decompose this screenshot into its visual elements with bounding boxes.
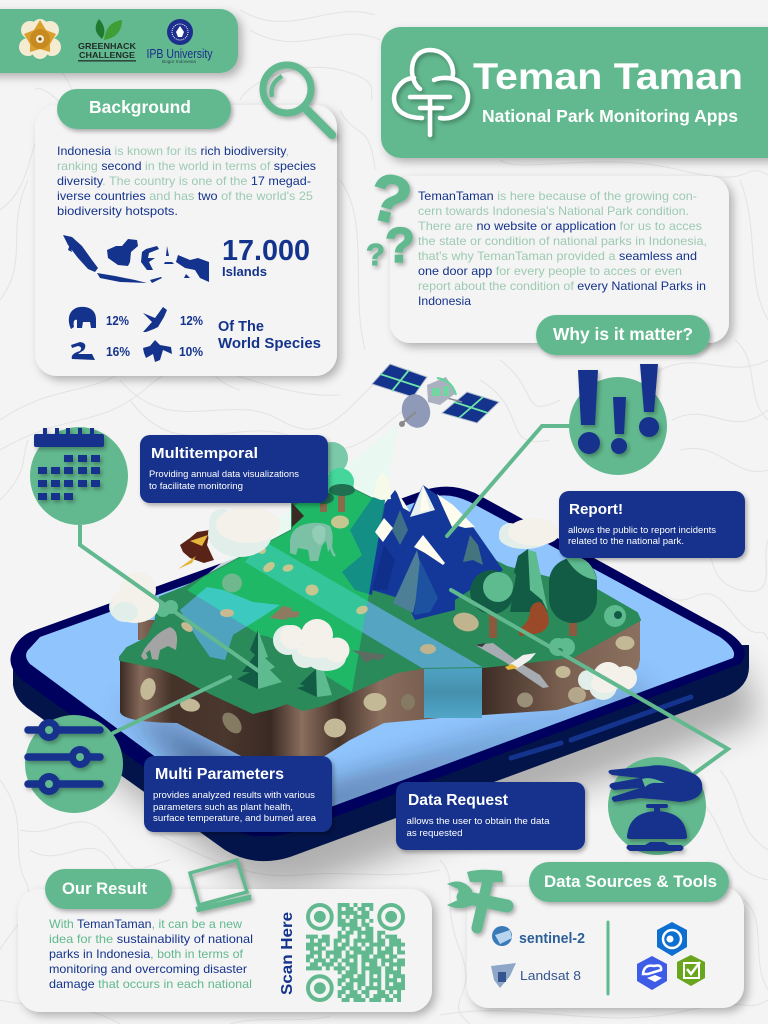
logo: greenhack challenge: CHALLENGE bbox=[79, 50, 135, 60]
background paragraph: iverse countries and has two of the world's 25 bbox=[57, 189, 313, 203]
icon: blue globe app bbox=[657, 922, 687, 956]
beam over surface bbox=[187, 490, 385, 692]
heading: data sources and tools bbox=[529, 862, 729, 902]
heading: background bbox=[57, 89, 231, 129]
heading: why is it matter: Why is it matter? bbox=[553, 324, 693, 344]
background paragraph: biodiversity hotspots. bbox=[57, 204, 178, 218]
result paragraph: damage that occurs in each national bbox=[49, 977, 252, 991]
callout: multitemporal bbox=[140, 435, 328, 503]
result paragraph bbox=[49, 917, 253, 991]
species caption bbox=[218, 319, 321, 352]
callout: report: Report! bbox=[569, 501, 623, 518]
callout: multi parameters: surface temperature, and burned area bbox=[153, 813, 317, 824]
panel: data sources and tools bbox=[447, 862, 744, 1008]
icon: purple cloud app bbox=[637, 956, 667, 990]
connector: data request bbox=[451, 590, 728, 773]
icon: satellite bbox=[372, 364, 499, 431]
title: Teman Taman bbox=[473, 56, 743, 97]
icon: snake bbox=[71, 342, 95, 360]
connector: report bbox=[447, 426, 569, 536]
right forest bbox=[470, 549, 626, 656]
species caption: Of The bbox=[218, 319, 264, 335]
callout: multitemporal: Multitemporal bbox=[151, 445, 258, 462]
icon: question marks: ? bbox=[366, 237, 385, 272]
stat: flower share: 10% bbox=[179, 345, 203, 359]
stat: 17.000 islands: 17.000 bbox=[222, 235, 310, 267]
callout: data request bbox=[396, 782, 585, 850]
logo: university emblem bbox=[19, 19, 61, 59]
icon: magnifier bbox=[263, 65, 332, 135]
surface rocks bbox=[179, 546, 481, 654]
scan here label: Scan Here bbox=[279, 912, 296, 995]
waterfall bbox=[424, 667, 482, 718]
icon: laptop bbox=[190, 860, 250, 911]
species caption: World Species bbox=[218, 336, 321, 352]
cloud bbox=[273, 619, 350, 671]
animal: rhinoceros bbox=[141, 627, 177, 660]
heading: our result bbox=[45, 869, 172, 909]
background paragraph bbox=[57, 144, 316, 218]
snow caps bbox=[373, 472, 391, 500]
icon: flower bbox=[143, 340, 172, 362]
panel: our result bbox=[18, 860, 432, 1012]
clouds bbox=[109, 507, 637, 700]
satellite beam bbox=[187, 425, 398, 692]
logo: landsat 8 bbox=[491, 963, 581, 988]
callout: data request: allows the user to obtain the data bbox=[406, 816, 550, 827]
icon: exclamation marks bbox=[569, 364, 667, 475]
island soil bbox=[120, 617, 640, 778]
why paragraph: cern towards Indonesia's National Park condition. bbox=[418, 204, 689, 218]
why paragraph: one door app for every people to acces or even bbox=[418, 264, 682, 278]
logo: landsat 8: Landsat 8 bbox=[520, 968, 581, 983]
qr code bbox=[306, 905, 405, 1000]
animal: elephant bbox=[290, 523, 335, 561]
tablet screen bbox=[26, 495, 734, 806]
tablet bbox=[0, 480, 768, 890]
panel: why it matters bbox=[362, 158, 729, 355]
logo: ipb university: IPB University bbox=[146, 47, 213, 61]
callout: multi parameters: parameters such as plant health, bbox=[153, 802, 293, 813]
heading: why is it matter bbox=[536, 315, 710, 355]
panel: background bbox=[35, 65, 337, 376]
why paragraph: There are no website or application for us to acces bbox=[418, 219, 702, 233]
why paragraph bbox=[418, 189, 707, 308]
result paragraph: monitoring and overcoming disaster bbox=[49, 962, 247, 976]
background paragraph: Indonesia is known for its rich biodiversity , bbox=[57, 144, 289, 158]
stat: 17.000 islands: Islands bbox=[222, 265, 267, 279]
callout: multitemporal: to facilitate monitoring bbox=[149, 481, 243, 492]
icon: calendar bbox=[30, 427, 128, 525]
animal: orangutan bbox=[518, 602, 549, 636]
result paragraph: idea for the sustainability of national bbox=[49, 932, 253, 946]
logo: ipb university bbox=[146, 19, 213, 64]
heading: background: Background bbox=[89, 97, 191, 117]
subtitle: National Park Monitoring Apps bbox=[482, 106, 738, 126]
header: title panel bbox=[381, 27, 768, 158]
lake highlight bbox=[196, 587, 280, 626]
icon: green survey app bbox=[677, 955, 705, 986]
why paragraph: Indonesia bbox=[418, 294, 471, 308]
callout: data request: as requested bbox=[406, 828, 462, 839]
cloud bbox=[208, 507, 280, 557]
icon: bird bbox=[143, 307, 167, 332]
left mountain face bbox=[342, 497, 385, 595]
map of indonesia bbox=[63, 235, 209, 283]
icon: tree logo bbox=[394, 50, 468, 135]
animal: platypus bbox=[352, 650, 386, 663]
tablet shadow bbox=[40, 660, 760, 890]
logo: ipb university: Bogor Indonesia bbox=[162, 59, 197, 64]
logo bar bbox=[0, 9, 238, 73]
soil rocks bbox=[138, 636, 634, 738]
logo: greenhack challenge: GREENHACK bbox=[78, 41, 137, 51]
callout: multi parameters: provides analyzed results with various bbox=[153, 790, 315, 801]
callout: report: allows the public to report incidents bbox=[568, 525, 716, 536]
callout: multi parameters bbox=[144, 756, 332, 832]
logo: sentinel-2 bbox=[492, 926, 585, 947]
callout: report: related to the national park. bbox=[568, 536, 684, 547]
icon: elephant bbox=[69, 307, 96, 329]
connector: multi parameters bbox=[113, 677, 230, 733]
heading: our result: Our Result bbox=[62, 880, 147, 898]
result paragraph: parks in Indonesia , both in terms of bbox=[49, 947, 244, 961]
river bbox=[245, 540, 482, 668]
back soil sliver bbox=[292, 503, 304, 527]
background paragraph: diversity. The country is one of the 17 megad- bbox=[57, 174, 311, 188]
callout: multi parameters: Multi Parameters bbox=[155, 766, 284, 783]
cloud bbox=[109, 572, 159, 623]
background paragraph: ranking second in the world in terms of species bbox=[57, 159, 316, 173]
rock pile bbox=[270, 606, 300, 620]
back-left trees bbox=[314, 442, 355, 528]
stat: bird share: 12% bbox=[180, 314, 203, 328]
callout: data request: Data Request bbox=[408, 792, 508, 809]
tablet rim bbox=[10, 487, 745, 836]
animal: seagull bbox=[475, 643, 549, 688]
stat: elephant share: 12% bbox=[106, 314, 129, 328]
cloud bbox=[578, 662, 637, 700]
animal: bird of paradise bbox=[178, 530, 214, 569]
island bbox=[109, 442, 641, 756]
lake bbox=[180, 587, 280, 660]
result paragraph: With TemanTaman, it can be a new bbox=[49, 917, 242, 931]
icon: question marks: ? bbox=[385, 219, 415, 273]
cloud bbox=[499, 518, 560, 549]
why paragraph: TemanTaman is here because of the growing con- bbox=[418, 189, 697, 203]
callout: multitemporal: Providing annual data visualizations bbox=[149, 469, 299, 480]
icon: hand and service bell bbox=[608, 757, 706, 855]
heading: data sources and tools: Data Sources & Tools bbox=[544, 873, 717, 891]
left trees bbox=[156, 600, 332, 697]
icon: wrench and hammer bbox=[447, 870, 507, 928]
why paragraph: report about the condition of every National Parks in bbox=[418, 279, 706, 293]
mountains bbox=[372, 472, 503, 620]
connector: multitemporal bbox=[80, 525, 260, 672]
boulder bbox=[222, 574, 242, 592]
callout: report bbox=[559, 491, 745, 558]
logo: greenhack challenge bbox=[78, 19, 137, 62]
icon: parameter sliders bbox=[25, 715, 123, 813]
stat: snake share: 16% bbox=[106, 345, 130, 359]
why paragraph: the state or condition of national parks in Indonesia, bbox=[418, 234, 707, 248]
why paragraph: that's why TemanTaman provided a seamless and bbox=[418, 249, 697, 263]
icon: question marks: ? bbox=[362, 158, 419, 239]
logo: sentinel-2: sentinel-2 bbox=[519, 930, 585, 947]
tablet side bbox=[13, 645, 749, 861]
island surface bbox=[120, 485, 640, 713]
